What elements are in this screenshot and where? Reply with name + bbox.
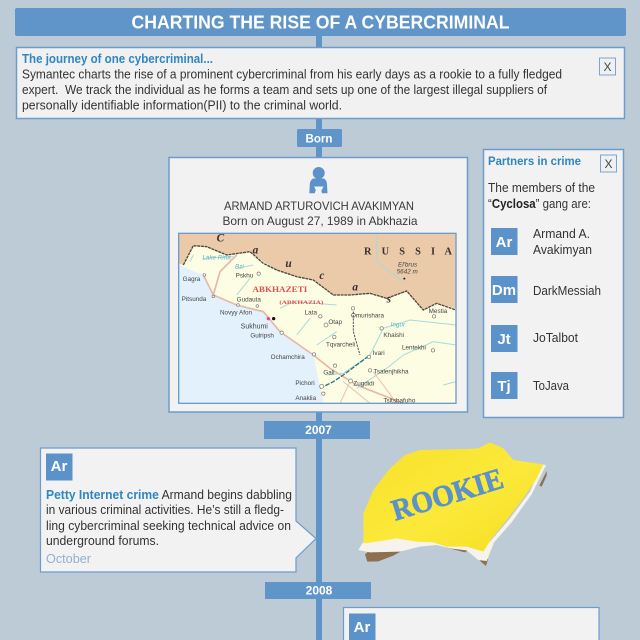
map: Abkhazia: a: [253, 245, 259, 257]
map: Abkhazia: ABKHAZETI: [252, 285, 307, 294]
map labels: Khaishi: [383, 332, 404, 339]
map: Abkhazia: u: [285, 258, 292, 270]
map: Abkhazia: (ABKHAZIA): [279, 299, 323, 306]
map labels: Omurishara: [351, 312, 385, 319]
label: 2007: [264, 421, 370, 439]
map labels: Tqvarcheli: [326, 341, 355, 348]
member: DarkMessiah: DarkMessiah: [533, 284, 601, 298]
map labels: Ivari: [373, 350, 385, 357]
close button: X: [603, 60, 612, 74]
sticker: rookie: [358, 442, 547, 566]
map labels: El'brus: [398, 261, 418, 268]
event text: Petty Internet crime Armand begins dabbling: [46, 488, 292, 502]
map labels: Ochamchira: [271, 354, 305, 361]
birth details: Born on August 27, 1989 in Abkhazia: [222, 214, 418, 228]
map labels: Gulripsh: [250, 332, 274, 339]
member: Armand: Ar: [496, 234, 512, 251]
map labels: Lata: [305, 309, 317, 316]
map labels: Mestia: [429, 308, 448, 315]
avatar: Ar: Ar: [51, 458, 67, 475]
title banner: CHARTING THE RISE OF A CYBERCRIMINAL: [132, 12, 510, 32]
map labels: Novyy Afon: [220, 310, 252, 317]
map: Abkhazia: [179, 233, 456, 404]
avatar: Ar: Ar: [354, 619, 370, 636]
avatar: Ar: [349, 614, 376, 640]
label: 2008: 2008: [306, 584, 333, 598]
close button: X: [604, 157, 613, 171]
map: Abkhazia: s: [386, 293, 392, 305]
partners intro: “Cyclosa” gang are:: [488, 197, 591, 211]
intro text: expert. We track the individual as he forms a team and sets up one of the largest illegal suppliers of: [22, 83, 547, 97]
label: Born: [297, 129, 342, 147]
member: JoTalbot: Jt: [497, 331, 511, 348]
timeline spine: [316, 36, 322, 640]
label: 2007: 2007: [305, 423, 332, 437]
map labels: Otap: [328, 319, 343, 326]
map labels: Ingur: [391, 321, 406, 328]
map labels: Pitsunda: [182, 296, 207, 303]
panel: partners in crime: [484, 150, 624, 418]
label: Born: Born: [306, 132, 332, 146]
map: Abkhazia: R U S S I A: [364, 246, 453, 257]
panel: introduction: [16, 48, 624, 118]
member: ToJava: ToJava: [533, 379, 569, 393]
Russia region: [179, 233, 456, 310]
event text: underground forums.: [46, 534, 159, 548]
map labels: [182, 254, 448, 404]
intro heading: The journey of one cybercriminal...: [22, 52, 213, 66]
event text: ling cybercriminal seeking technical advice on: [46, 519, 291, 533]
map labels: Lake Rina: [202, 254, 231, 261]
person name: ARMAND ARTUROVICH AVAKIMYAN: [224, 199, 414, 213]
map labels: Sukhumi: [241, 324, 268, 331]
member: JoTalbot: JoTalbot: [533, 331, 579, 345]
map labels: Pskhu: [236, 273, 254, 280]
map labels: 5642 m: [397, 269, 418, 276]
panel: 2008 event: [344, 608, 599, 640]
partners heading: Partners in crime: [488, 154, 581, 168]
member: Armand: [491, 227, 592, 257]
partners intro: The members of the: [488, 181, 595, 195]
member: ToJava: Tj: [497, 378, 511, 395]
avatar: Ar: [46, 454, 72, 480]
member: ToJava: [491, 372, 569, 399]
map labels: Tsitsbafuho: [383, 397, 416, 404]
partners intro: [488, 181, 595, 211]
title banner: [15, 8, 626, 36]
intro text: Symantec charts the rise of a prominent cybercriminal from his early days as a rookie to a fully fledged: [22, 68, 562, 82]
close button: [600, 58, 616, 75]
sticker text: ROOKIE: [388, 462, 507, 527]
member: DarkMessiah: [491, 276, 601, 303]
map labels: Anaklia: [295, 395, 317, 402]
map: Abkhazia: C: [217, 233, 225, 245]
member: Armand: Avakimyan: [533, 243, 592, 257]
intro text: [22, 68, 562, 112]
intro text: personally identifiable information(PII) to the criminal world.: [22, 98, 342, 112]
map labels: Gudauta: [237, 296, 261, 303]
map: Abkhazia: a: [352, 281, 358, 293]
map labels: Lentekhi: [402, 345, 426, 352]
event text: [46, 488, 292, 548]
panel: birth record: [169, 158, 468, 412]
map labels: Gali: [323, 369, 335, 376]
member: DarkMessiah: Dm: [492, 282, 516, 299]
icon: baby: [309, 167, 328, 193]
map: Abkhazia: c: [319, 270, 324, 282]
map labels: Gagra: [183, 276, 201, 283]
member: Armand: Armand A.: [533, 227, 590, 241]
map labels: Bzi: [235, 263, 244, 270]
close button: [600, 155, 616, 172]
member: JoTalbot: [491, 325, 579, 352]
event date: October: [46, 552, 91, 566]
map labels: Zugdidi: [353, 381, 374, 388]
callout: petty internet crime: [40, 448, 316, 572]
event text: in various criminal activities. He’s still a fledg-: [46, 503, 284, 517]
map labels: Pichori: [295, 380, 315, 387]
label: 2008: [265, 582, 371, 599]
map labels: Tsalenjhikha: [374, 368, 409, 375]
